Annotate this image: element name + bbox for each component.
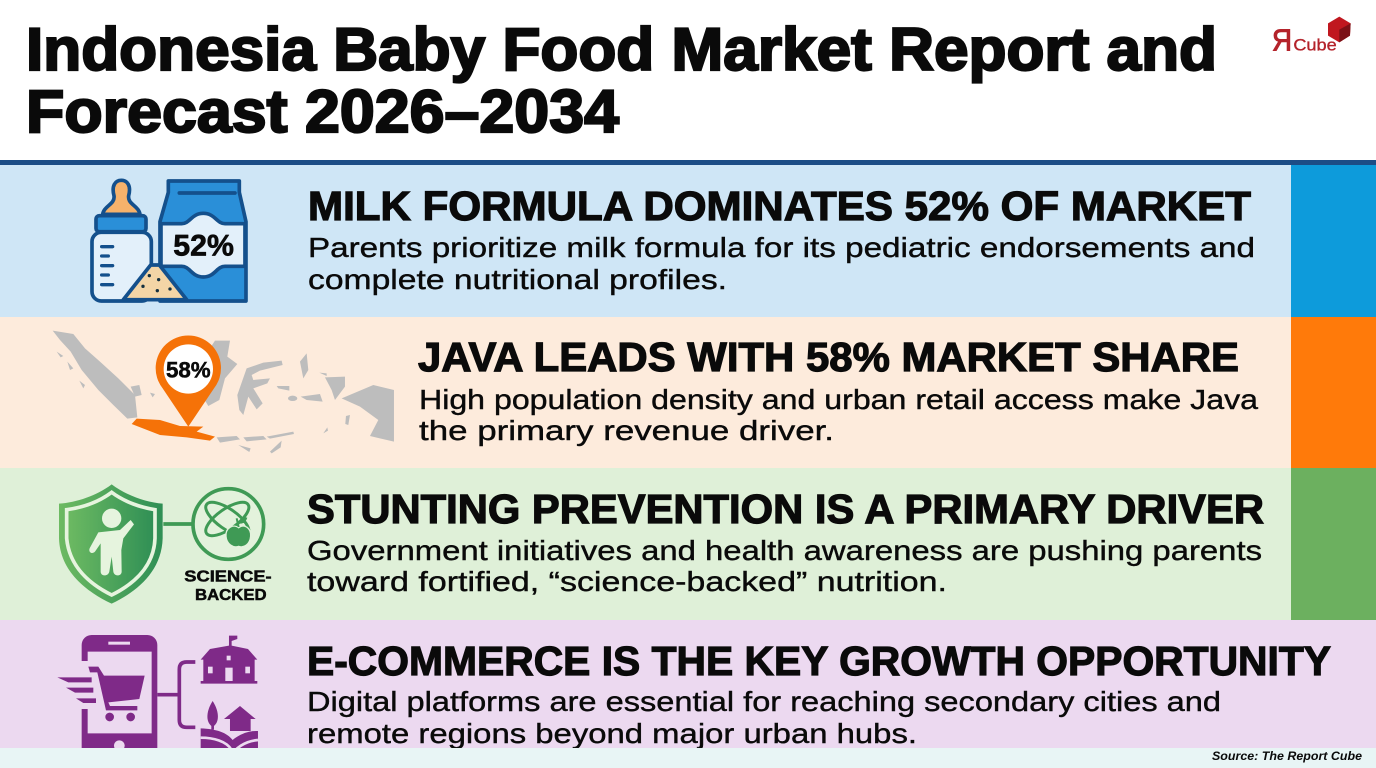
body text (307, 686, 1221, 749)
icon: bottle and formula bag: 52% (173, 230, 234, 263)
body text: remote regions beyond major urban hubs. (307, 718, 917, 749)
Java highlight (132, 419, 215, 441)
label: science-backed: BACKED (195, 587, 267, 604)
body text: the primary revenue driver. (419, 415, 834, 446)
body text: Parents prioritize milk formula for its pediatric endorsements and (308, 232, 1255, 263)
body text: complete nutritional profiles. (308, 264, 727, 295)
icon: phone, cart, town and village (57, 635, 258, 758)
icon: bottle and formula bag (92, 180, 246, 301)
heading: E-COMMERCE IS THE KEY GROWTH OPPORTUNITY (307, 638, 1331, 684)
header rule (0, 160, 1376, 165)
panel: milk formula (0, 165, 1376, 317)
body text (307, 535, 1262, 597)
source note: Source: The Report Cube (1212, 749, 1362, 763)
body text (419, 384, 1258, 446)
title: Indonesia Baby Food Market Report and (26, 16, 1217, 83)
logo: RCube: Я (1272, 23, 1292, 57)
body text (308, 232, 1255, 295)
heading: MILK FORMULA DOMINATES 52% OF MARKET (308, 183, 1251, 229)
body text: toward fortified, “science-backed” nutrition. (307, 566, 947, 597)
panel: Java (0, 317, 1376, 468)
heading: STUNTING PREVENTION IS A PRIMARY DRIVER (307, 486, 1264, 532)
body text: High population density and urban retail access make Java (419, 384, 1258, 415)
label: science-backed (184, 569, 272, 604)
label: science-backed: SCIENCE- (184, 569, 272, 586)
panel: stunting prevention (0, 468, 1376, 620)
logo: RCube: Cube (1293, 36, 1337, 55)
heading: JAVA LEADS WITH 58% MARKET SHARE (418, 334, 1239, 380)
map pin (156, 335, 221, 427)
logo: RCube (1272, 17, 1351, 57)
footer strip (0, 748, 1376, 768)
map of Indonesia with pin (53, 331, 394, 453)
title (26, 16, 1217, 145)
body text: Government initiatives and health awareness are pushing parents (307, 535, 1262, 566)
icon: shield and science badge (59, 484, 272, 604)
title: Forecast 2026–2034 (26, 78, 620, 145)
body text: Digital platforms are essential for reaching secondary cities and (307, 686, 1221, 717)
map pin: 58% (166, 357, 211, 382)
panel: e-commerce (0, 620, 1376, 758)
